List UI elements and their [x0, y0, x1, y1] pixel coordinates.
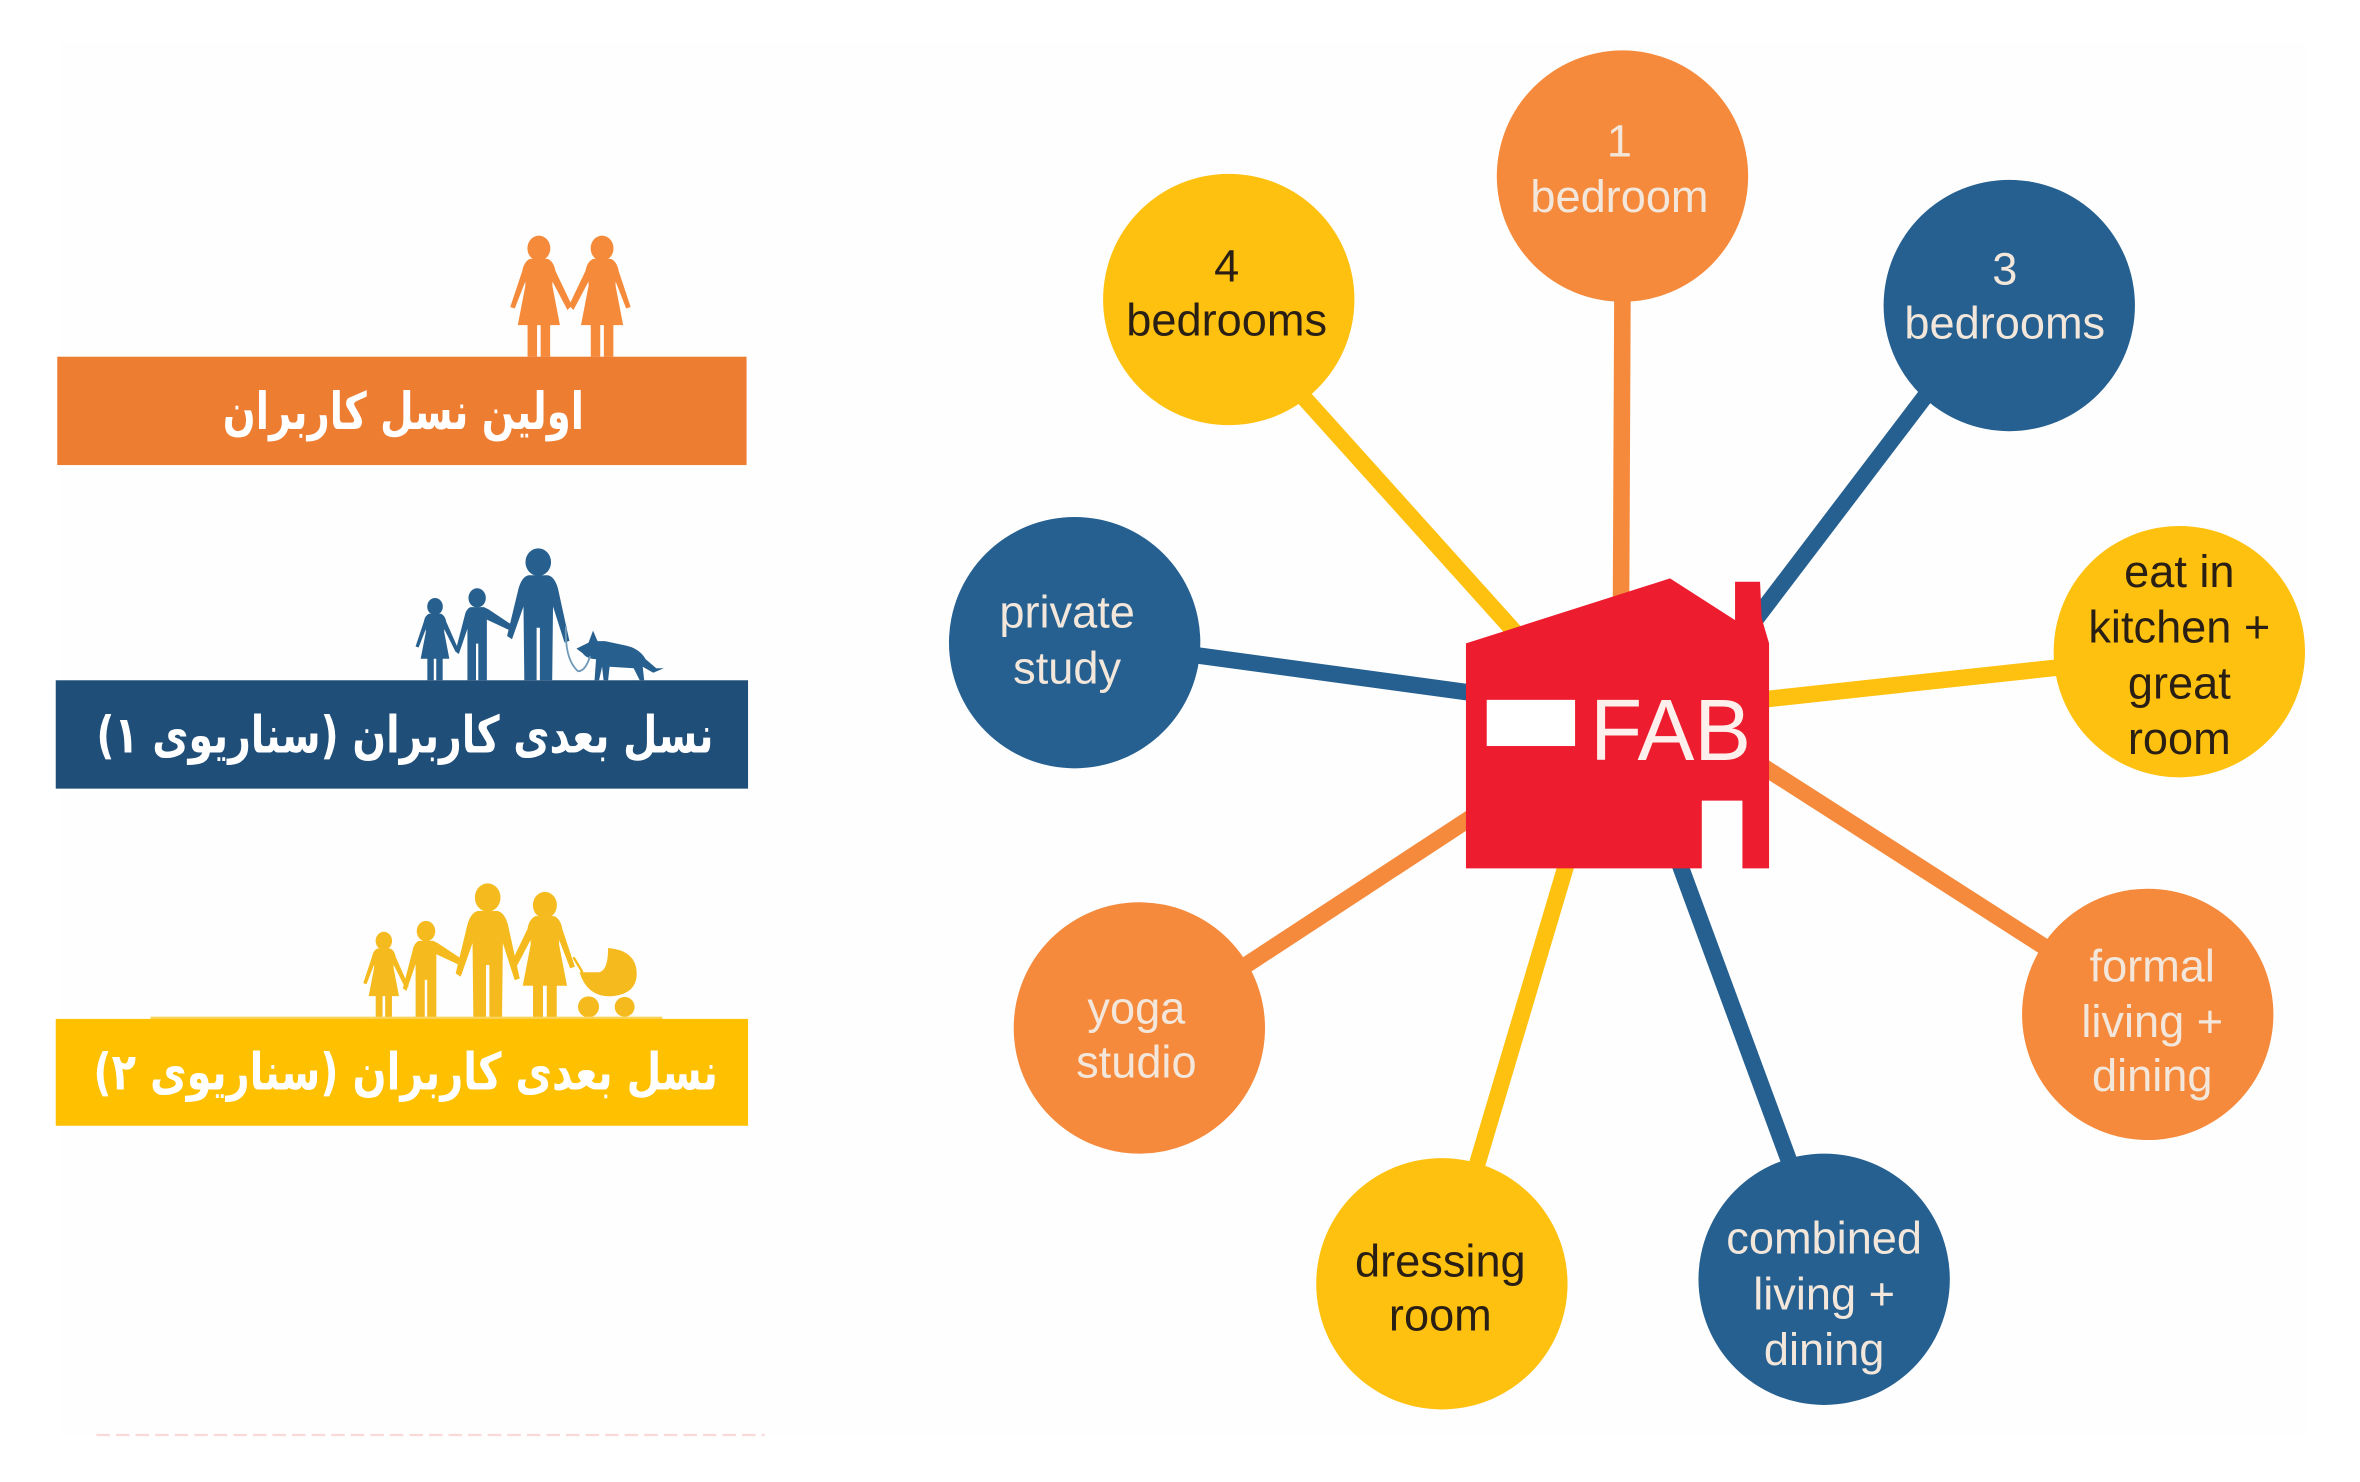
banner: next generation of users, scenario 2: نسل بعدی کاربران (سناریوی ۲) [93, 1044, 718, 1103]
circle: private study [949, 517, 1200, 768]
icon: family with dog [416, 548, 664, 680]
circle: 4 bedrooms [1103, 174, 1354, 425]
circle: eat in kitchen + great room: room [2128, 713, 2231, 764]
circle: 3 bedrooms: 3 [1992, 243, 2017, 294]
spokes connecting the house to the circles [1159, 286, 2107, 1222]
banner: next generation of users, scenario 2 [56, 1019, 748, 1126]
central FAB house [1466, 578, 1769, 868]
circle: 3 bedrooms [1884, 180, 2135, 431]
circle: yoga studio [1014, 902, 1265, 1154]
circle: 1 bedroom: bedroom [1530, 171, 1709, 222]
circle: eat in kitchen + great room: eat in [2124, 546, 2235, 597]
circle: eat in kitchen + great room: kitchen + [2088, 602, 2270, 653]
circle: formal living + dining: living + [2081, 996, 2223, 1047]
circle: 4 bedrooms: bedrooms [1126, 295, 1327, 346]
circle: combined living + dining: living + [1753, 1268, 1895, 1319]
icon: family with pram [151, 883, 662, 1020]
banner: first generation of users: اولین نسل کاربران [223, 383, 584, 442]
circle: dressing room: dressing [1355, 1235, 1526, 1286]
circle: combined living + dining: dining [1764, 1324, 1884, 1375]
circle: dressing room: room [1389, 1289, 1492, 1340]
circle: private study: private [999, 587, 1135, 638]
central FAB house: FAB [1590, 682, 1751, 779]
banner: first generation of users [57, 357, 747, 465]
circle: 1 bedroom: 1 [1607, 116, 1632, 167]
circle: combined living + dining [1698, 1154, 1950, 1405]
circle: yoga studio: studio [1076, 1037, 1197, 1088]
circle: combined living + dining: combined [1726, 1213, 1922, 1264]
icon: couple of first-generation users [510, 236, 631, 357]
circle: eat in kitchen + great room [2054, 526, 2305, 777]
circle: yoga studio: yoga [1087, 982, 1186, 1033]
circle: 3 bedrooms: bedrooms [1904, 298, 2105, 349]
circle: formal living + dining [2022, 889, 2273, 1140]
circle: formal living + dining: formal [2090, 940, 2215, 991]
banner: next generation of users, scenario 1 [56, 680, 748, 789]
circle: eat in kitchen + great room: great [2128, 657, 2231, 708]
circle: private study: study [1013, 642, 1121, 693]
circle: 4 bedrooms: 4 [1214, 240, 1239, 291]
circle: 1 bedroom [1497, 50, 1748, 302]
circle: dressing room [1316, 1158, 1568, 1409]
banner: next generation of users, scenario 1: نسل بعدی کاربران (سناریوی ۱) [96, 707, 713, 766]
circle: formal living + dining: dining [2092, 1050, 2212, 1101]
